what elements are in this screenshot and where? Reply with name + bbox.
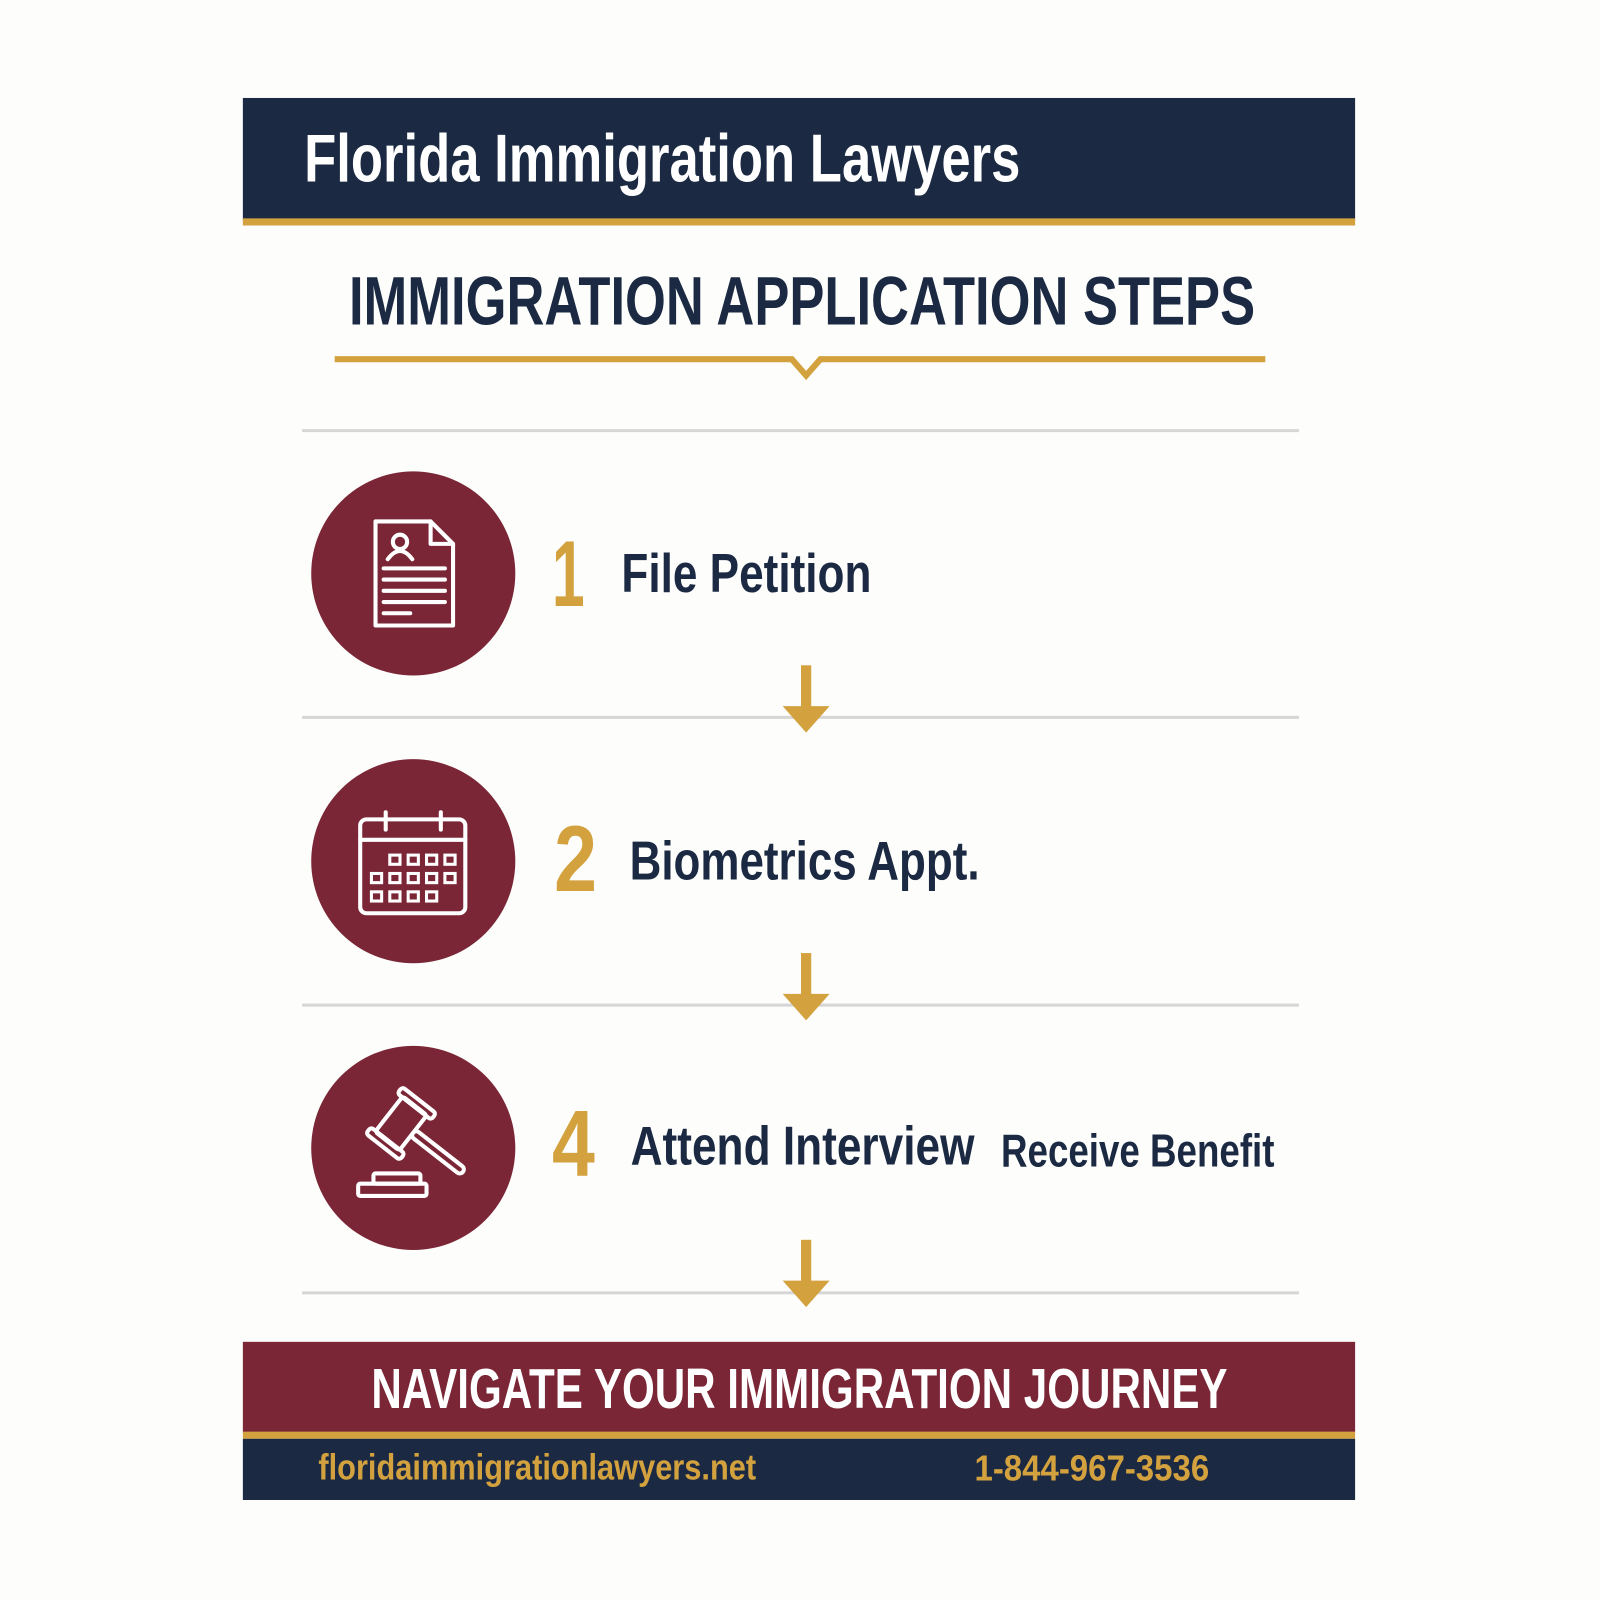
arrow 1 xyxy=(783,665,830,733)
number 1: 1 xyxy=(552,521,585,626)
header banner xyxy=(243,98,1355,226)
arrow 2 xyxy=(783,953,830,1020)
footer slogan: NAVIGATE YOUR IMMIGRATION JOURNEY xyxy=(371,1357,1228,1420)
footer banner xyxy=(243,1342,1355,1500)
label: Receive Benefit: Receive Benefit xyxy=(1001,1124,1274,1176)
step 4: attend interview xyxy=(311,1046,1274,1250)
icon: gavel xyxy=(311,1046,515,1250)
number 2: 2 xyxy=(554,806,597,911)
label: Biometrics Appt.: Biometrics Appt. xyxy=(630,830,980,892)
website: floridaimmigrationlawyers.net xyxy=(318,1448,756,1488)
icon: document xyxy=(311,471,515,676)
number 4: 4 xyxy=(552,1091,595,1196)
icon: calendar xyxy=(311,759,515,963)
arrow 3 xyxy=(783,1240,830,1307)
phone: 1-844-967-3536 xyxy=(974,1449,1209,1489)
label: Attend Interview: Attend Interview xyxy=(631,1114,975,1176)
label: File Petition: File Petition xyxy=(621,542,871,604)
step 1: file petition xyxy=(311,471,871,676)
title underline with chevron xyxy=(335,359,1265,376)
header title: Florida Immigration Lawyers xyxy=(304,122,1020,197)
main title xyxy=(335,263,1265,376)
step 2: biometrics xyxy=(311,759,980,963)
main title: IMMIGRATION APPLICATION STEPS xyxy=(349,263,1255,339)
